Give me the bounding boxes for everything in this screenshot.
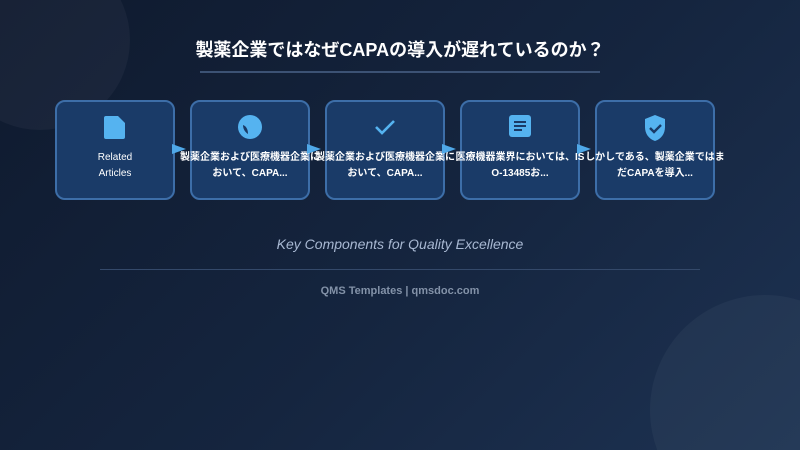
card 1: Articles <box>99 168 131 179</box>
icon: globe <box>238 115 262 139</box>
card 4 <box>460 100 580 200</box>
card 3 <box>325 100 445 200</box>
card 1 <box>55 100 175 200</box>
subtitle: Key Components for Quality Excellence <box>277 236 523 252</box>
card 1: Related <box>98 152 132 163</box>
icon: notes <box>509 115 531 137</box>
title: 製薬企業ではなぜCAPAの導入が遅れているのか？ <box>195 40 605 60</box>
card 3: おいて、CAPA... <box>347 168 423 179</box>
card 2: 製薬企業および医療機器企業に <box>180 152 320 163</box>
arrows <box>172 144 591 154</box>
card 5 <box>595 100 715 200</box>
card 2: おいて、CAPA... <box>212 168 288 179</box>
icon: check <box>375 120 395 135</box>
icon: document <box>104 116 125 139</box>
card 5: しかしである、製薬企業ではま <box>585 152 725 163</box>
card 5: だCAPAを導入... <box>617 168 693 179</box>
card 4: 医療機器業界においては、IS <box>456 152 584 163</box>
card 2 <box>190 100 310 200</box>
icon: shield <box>645 115 665 141</box>
card 3: 製薬企業および医療機器企業に <box>315 152 455 163</box>
footer: QMS Templates | qmsdoc.com <box>321 285 479 297</box>
card 4: O-13485お... <box>491 168 549 179</box>
